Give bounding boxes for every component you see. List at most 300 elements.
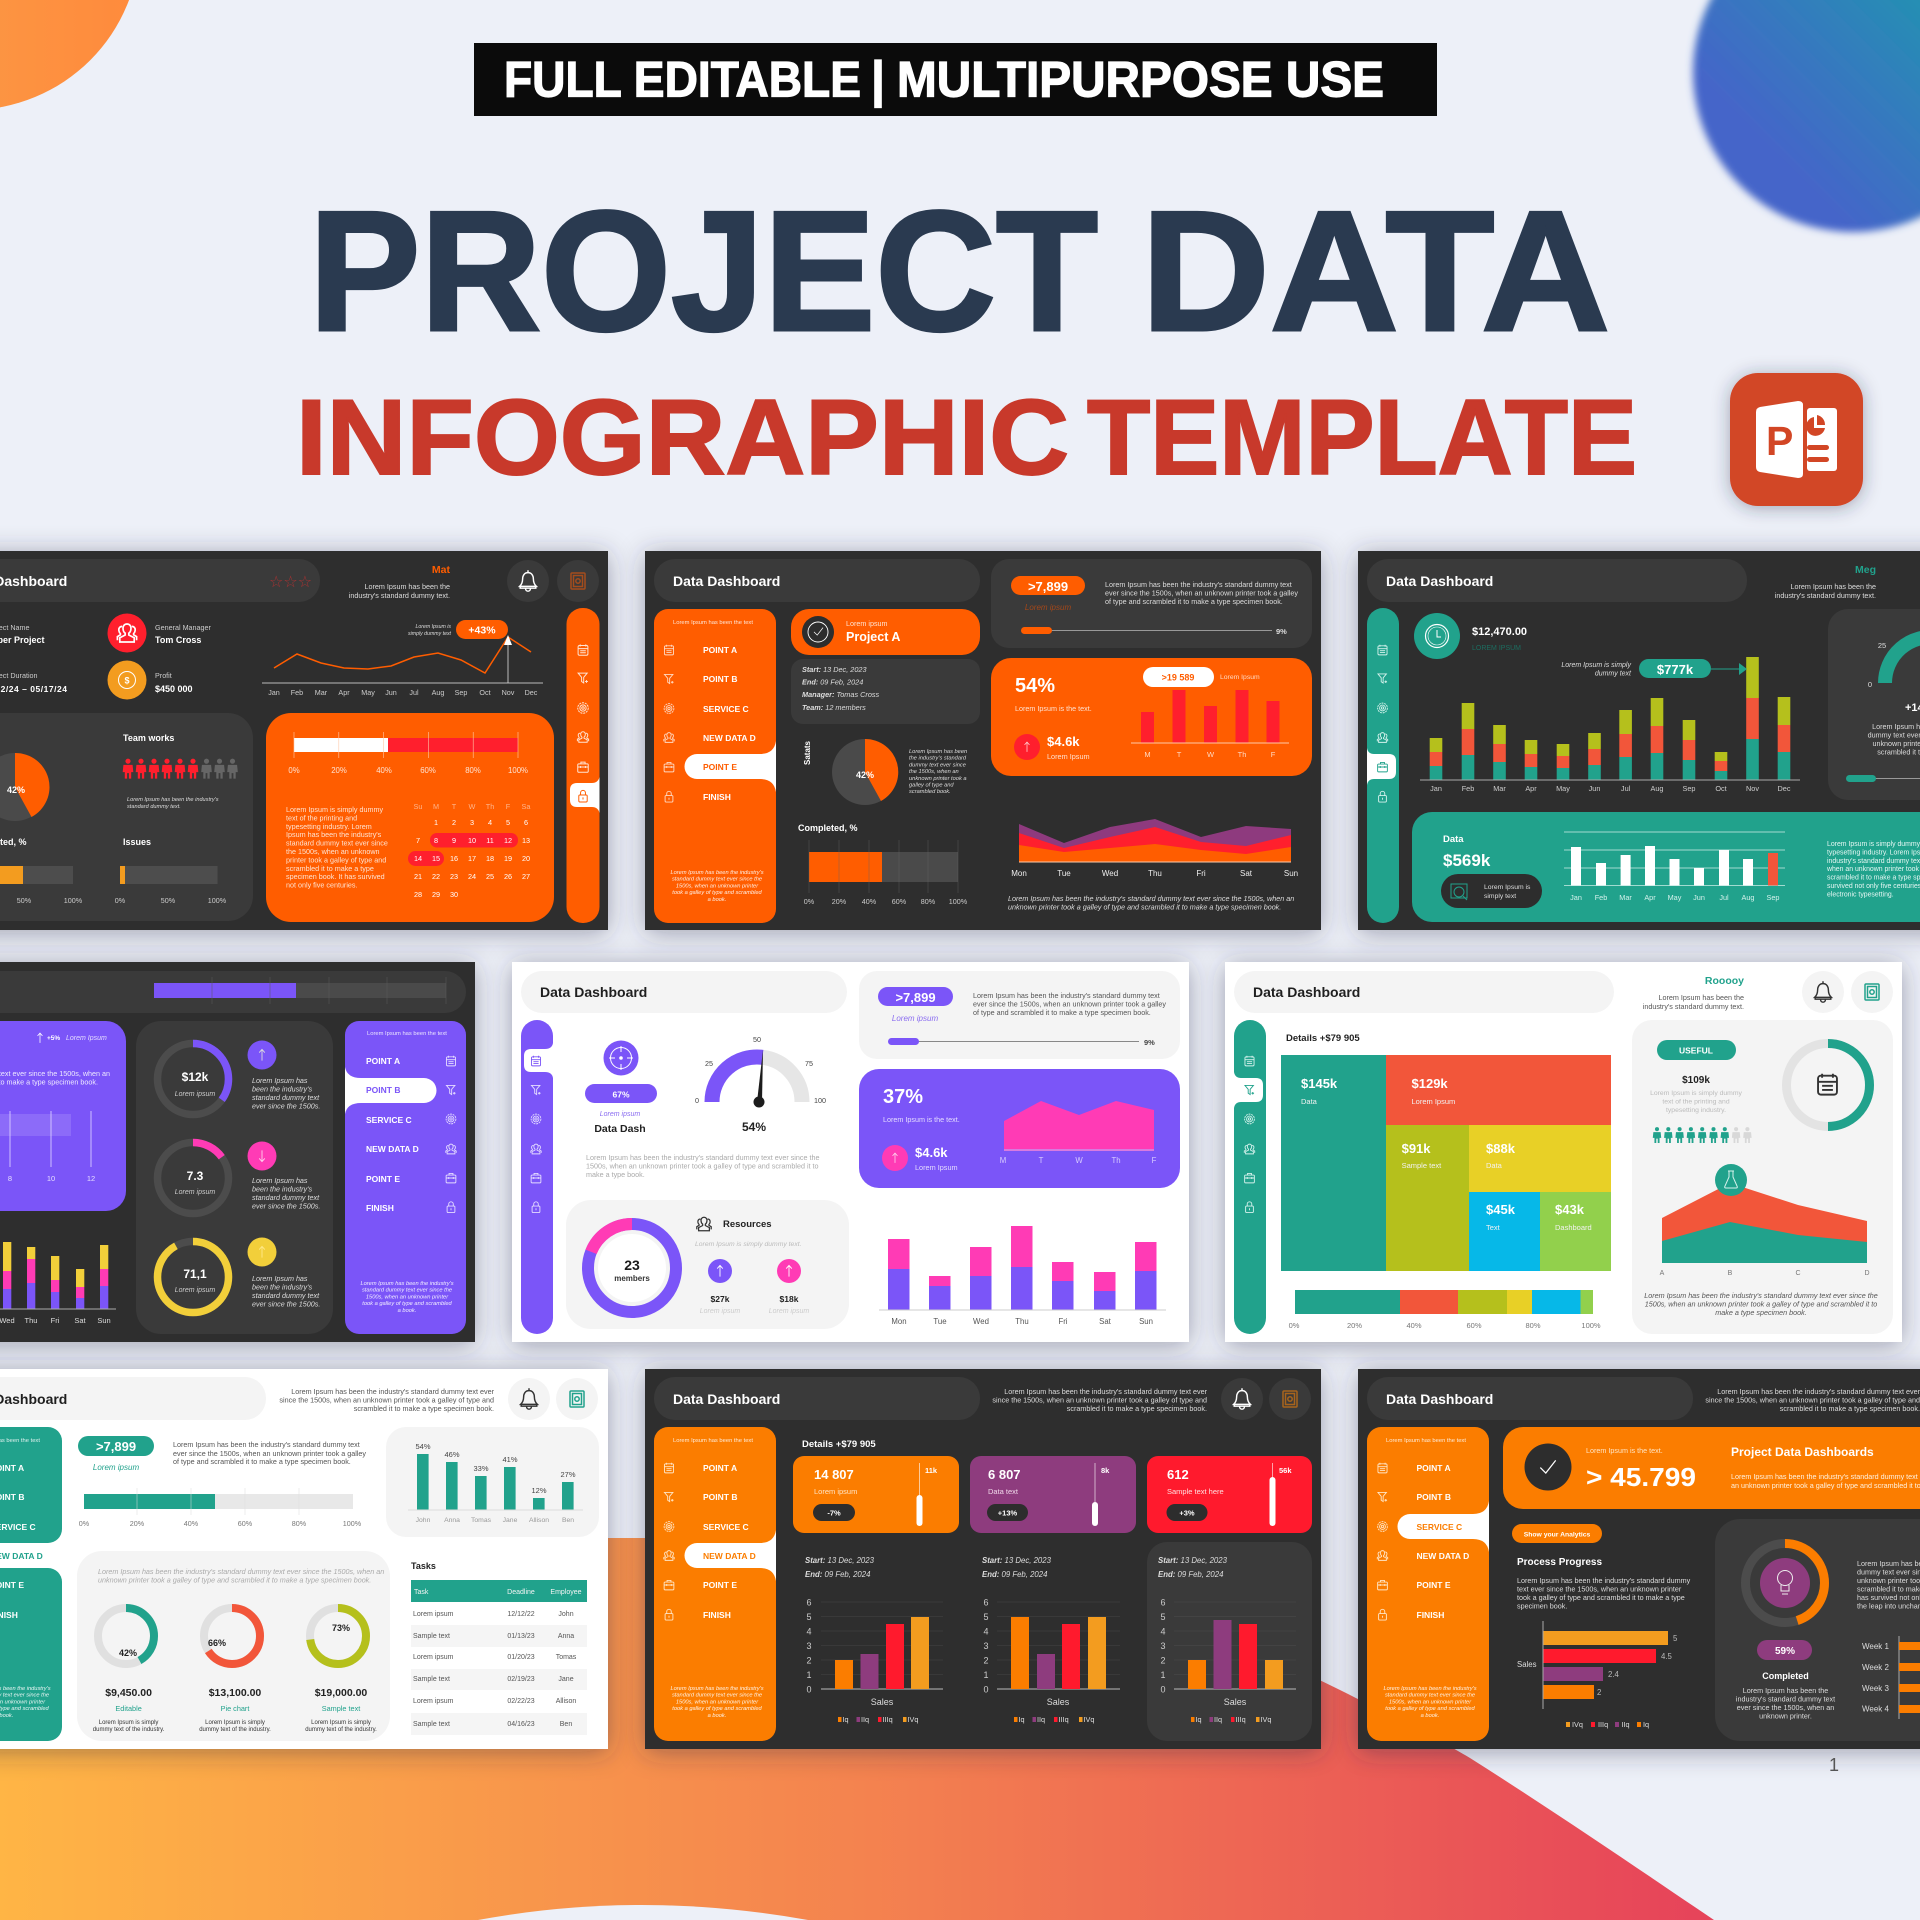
left navigation rail — [1234, 1020, 1266, 1334]
project details: End: 09 Feb, 2024 — [802, 678, 863, 686]
resources panel: Lorem ipsum — [769, 1308, 809, 1315]
sidebar menu: 1500s, when an unknown printer — [1389, 1699, 1472, 1705]
calendar: 26 — [504, 872, 512, 881]
area chart: Sun — [1284, 869, 1298, 878]
icon: coin: $ — [124, 676, 130, 686]
sidebar menu: a book. — [398, 1308, 416, 1314]
user text: industry's standard dummy text. — [349, 591, 450, 600]
KPI card: 6 807: +13% — [998, 1508, 1018, 1518]
completed bar: 50% — [17, 896, 32, 905]
donut with calendar icon — [1786, 1044, 1870, 1126]
calendar: 10 — [468, 836, 476, 845]
bar chart 2: 5 — [983, 1612, 989, 1622]
stacked bar chart: Sat — [1099, 1317, 1112, 1326]
panel: teal dark dashboard (row 1 right) — [1358, 551, 1920, 930]
icon: bell — [1802, 971, 1844, 1013]
orange banner — [1503, 1427, 1920, 1509]
bar chart 3: 4 — [1160, 1626, 1166, 1636]
gauge chart: 0 — [695, 1096, 699, 1105]
dates: End: 09 Feb, 2024 — [1158, 1570, 1224, 1579]
weekly bar chart: Week 3 — [1862, 1684, 1890, 1693]
left navigation rail — [1367, 608, 1399, 923]
stacked percent bar — [1289, 1290, 1601, 1330]
area chart — [1008, 819, 1298, 912]
sidebar menu: FINISH — [703, 792, 731, 802]
data dash stat: 67% — [612, 1090, 630, 1100]
user text: industry's standard dummy text. — [1643, 1002, 1744, 1011]
panel: progress rings — [136, 1021, 333, 1334]
tasks table: Allison — [556, 1698, 576, 1705]
sidebar menu: NEW DATA D — [703, 1551, 756, 1561]
dates: End: 09 Feb, 2024 — [982, 1570, 1048, 1579]
project card: Project A — [846, 630, 900, 644]
stacked bar chart: Thu — [1015, 1317, 1029, 1326]
horizontal bar chart: 2 — [1597, 1688, 1601, 1697]
bar chart 3: IIIq — [1236, 1715, 1246, 1724]
calendar: 7 — [416, 836, 420, 845]
panel: violet dark dashboard (row 2 left) — [0, 962, 475, 1342]
paragraph: specimen book. It has survived — [286, 872, 385, 881]
bar chart 1: IIIq — [882, 1715, 893, 1724]
pie chart 42%: unknown printer took a — [909, 776, 967, 782]
line chart: +43% — [468, 624, 496, 636]
bar chart by employee: John — [416, 1517, 431, 1524]
sidebar menu: standard dummy text ever since the — [1385, 1693, 1475, 1699]
paragraph: Lorem Ipsum is simply dummy — [286, 805, 383, 814]
weekly bar chart: Week 1 — [1862, 1642, 1890, 1651]
stat panel: ever since the 1500s, when an unknown printer took a galley — [1105, 588, 1298, 598]
paragraph: text of the printing and — [286, 813, 357, 822]
user text — [1643, 975, 1744, 1011]
calendar: 2 — [452, 818, 456, 827]
sidebar menu: a book. — [708, 897, 726, 903]
header bar — [1367, 1377, 1693, 1420]
calendar: 29 — [432, 890, 440, 899]
teal data panel: May — [1668, 893, 1682, 902]
sidebar menu: POINT B — [703, 674, 737, 684]
orange banner: Project Data Dashboards — [1731, 1445, 1874, 1459]
icon: team — [108, 614, 146, 652]
bar chart 1: Iq — [842, 1715, 849, 1724]
sidebar menu: a book. — [1421, 1713, 1439, 1719]
panel: orange dark dashboard (row 1 center) — [645, 551, 1321, 930]
weekly bar chart: Week 4 — [1862, 1704, 1890, 1714]
project facts: General Manager — [155, 623, 212, 632]
stacked bar chart: Sun — [97, 1316, 111, 1325]
stat panel: >7,899 — [1028, 579, 1068, 594]
user text: Mat — [432, 564, 450, 576]
sidebar menu: POINT B — [1416, 1492, 1451, 1502]
KPI card: 14 807: Lorem ipsum — [814, 1487, 857, 1496]
header bar: Data Dashboard — [540, 984, 647, 1000]
treemap: $88k — [1486, 1141, 1516, 1156]
stacked percent bar: 80% — [1525, 1321, 1541, 1330]
teal data panel: Jun — [1693, 893, 1705, 902]
sidebar menu: POINT E — [1416, 1580, 1451, 1590]
KPI card: 612: 612 — [1167, 1467, 1189, 1482]
header text: since the 1500s, when an unknown printer took a galley of type and — [279, 1396, 494, 1405]
panel: teal light dashboard (row 3 left) — [0, 1369, 608, 1749]
sidebar menu: Lorem Ipsum has been the industry's — [670, 1686, 764, 1692]
bottom white arc — [478, 1905, 808, 1920]
teal data panel: $569k — [1443, 851, 1491, 870]
stacked percent bar: 60% — [1466, 1321, 1482, 1330]
stat panel: of type and scrambled it to make a type specimen book. — [973, 1008, 1151, 1017]
sidebar menu: Lorem Ipsum has been the text — [673, 1438, 753, 1444]
completion panel: unknown printer. — [1759, 1712, 1812, 1720]
sidebar menu: POINT B — [703, 1492, 737, 1502]
calendar: M — [433, 802, 439, 811]
progress bar: 20% — [331, 766, 347, 775]
calendar: F — [506, 802, 511, 811]
treemap: Data — [1486, 1161, 1503, 1170]
header bar — [654, 1377, 980, 1420]
project facts — [0, 623, 212, 694]
progress bar: 60% — [420, 766, 436, 775]
calendar: 18 — [486, 854, 494, 863]
sidebar menu: standard dummy text ever since the — [672, 1693, 762, 1699]
analytics pill: Show your Analytics — [1524, 1532, 1591, 1538]
pie chart 42%: the industry's standard — [909, 756, 967, 762]
stat panel — [859, 971, 1180, 1059]
calendar: T — [452, 802, 457, 811]
calendar: 3 — [470, 818, 474, 827]
bar chart 1: IVq — [908, 1715, 918, 1724]
area chart: A — [1660, 1270, 1665, 1277]
teal data panel: electronic typesetting. — [1827, 891, 1894, 898]
bar chart by employee: Tomas — [471, 1517, 492, 1524]
data dash stat — [585, 1040, 657, 1135]
stat panel: Lorem ipsum — [892, 1014, 938, 1023]
dates: End: 09 Feb, 2024 — [805, 1570, 871, 1579]
horizontal bar chart: Sales — [1517, 1660, 1537, 1669]
clock stat: LOREM IPSUM — [1472, 645, 1521, 652]
panel: progress rings: 71,1 — [183, 1267, 207, 1281]
user text: Lorem Ipsum has been the — [1790, 582, 1876, 591]
horizontal bar chart: IVq — [1572, 1720, 1583, 1729]
sidebar menu: Lorem Ipsum has been the text — [1386, 1438, 1466, 1444]
stat and progress: 80% — [292, 1519, 307, 1528]
panel: progress rings: 7.3 — [187, 1169, 204, 1183]
completion panel: Lorem Ipsum has been the — [1743, 1686, 1828, 1695]
stacked bar chart: Dec — [1778, 784, 1791, 793]
stacked bar chart: Jan — [1430, 784, 1442, 793]
orange KPI panel with bar chart: M — [1144, 750, 1151, 759]
gauge chart: 54% — [742, 1120, 766, 1134]
bar chart 1 — [806, 1598, 943, 1724]
project details: Team: 12 members — [802, 703, 866, 712]
stat and progress: Lorem ipsum — [93, 1463, 139, 1472]
sidebar menu — [654, 609, 776, 923]
panel: progress rings: been the industry's — [252, 1282, 313, 1292]
area chart: Wed — [1102, 869, 1118, 878]
data dash stat: Data Dash — [594, 1123, 646, 1135]
sidebar menu: POINT A — [366, 1056, 400, 1066]
tasks table: Lorem ipsum — [413, 1698, 454, 1705]
main title: DATA — [1141, 176, 1610, 367]
resources panel: Resources — [723, 1219, 772, 1230]
bar chart 3 — [1160, 1598, 1296, 1724]
bar chart 2: IVq — [1084, 1715, 1094, 1724]
stacked bar chart: Jun — [1589, 784, 1600, 793]
stacked bar chart — [0, 1242, 116, 1325]
completion panel: 59% — [1775, 1646, 1795, 1657]
gauge chart: 75 — [805, 1059, 813, 1068]
stacked bar chart: dummy text — [1595, 670, 1632, 678]
clock stat — [1414, 613, 1527, 659]
KPI card: 6 807: 8k — [1101, 1466, 1110, 1475]
team pictogram: standard dummy text. — [127, 804, 181, 810]
sidebar menu: SERVICE C — [366, 1115, 412, 1125]
line chart: Feb — [291, 688, 303, 697]
donuts panel: Pie chart — [221, 1704, 249, 1713]
orange KPI panel with bar chart: F — [1271, 750, 1276, 759]
bar chart 2: Iq — [1018, 1715, 1025, 1724]
gauge chart: 25 — [705, 1059, 713, 1068]
sidebar menu: NEW DATA D — [366, 1144, 419, 1154]
project card — [791, 609, 980, 655]
tasks table: 04/16/23 — [507, 1721, 535, 1728]
page number: 1 — [1829, 1755, 1839, 1775]
horizontal bar chart: Iq — [1643, 1720, 1649, 1729]
bar chart by employee: 27% — [560, 1470, 576, 1479]
icon: PowerPoint logo: P — [1766, 418, 1793, 464]
teal data panel: Lorem Ipsum is — [1484, 884, 1531, 891]
KPI card: 612 — [1147, 1456, 1312, 1533]
donuts panel: $13,100.00 — [209, 1687, 261, 1699]
treemap: Lorem Ipsum — [1412, 1097, 1455, 1106]
violet KPI panel with area chart: F — [1152, 1156, 1157, 1165]
resources panel: 23 — [624, 1257, 640, 1273]
donuts panel: Lorem Ipsum has been the industry's standard dummy text ever since the 1500s, when an — [98, 1567, 384, 1576]
sidebar menu: took a galley of type and scrambled — [672, 1706, 763, 1712]
sidebar menu: standard dummy text ever since the — [362, 1288, 452, 1294]
gauge chart — [695, 1035, 826, 1134]
top banner: FULL EDITABLE — [504, 52, 861, 108]
calendar: 28 — [414, 890, 422, 899]
orange KPI panel with bar chart: Lorem Ipsum — [1220, 674, 1260, 681]
stacked bar chart: Mar — [1493, 784, 1506, 793]
user text: Lorem Ipsum has been the — [1658, 993, 1744, 1002]
line chart: Jan — [268, 688, 280, 697]
panel: orange progress and calendar — [266, 713, 554, 922]
panel: amber dark dashboard (row 3 right) — [1358, 1369, 1920, 1749]
panel: progress rings: Lorem ipsum — [175, 1189, 215, 1196]
teal data panel: Feb — [1595, 893, 1607, 902]
sidebar menu: took a galley of type and scrambled — [672, 890, 763, 896]
icon: safe — [1851, 971, 1893, 1013]
icon: safe — [556, 1378, 598, 1420]
stacked bar chart: Jul — [1621, 784, 1631, 793]
bar chart 1: IIq — [861, 1715, 869, 1724]
pie chart 42%: 42% — [7, 785, 25, 795]
stat panel: Lorem Ipsum has been the industry's standard dummy text — [1105, 580, 1292, 589]
bar chart 1: 3 — [806, 1641, 812, 1651]
orange KPI panel with bar chart: Lorem Ipsum is the text. — [1015, 704, 1092, 713]
gauge panel: 25 — [1878, 641, 1886, 650]
header text: Lorem Ipsum has been the industry's standard dummy text ever — [1004, 1387, 1208, 1396]
tasks table: Anna — [558, 1633, 574, 1640]
panel: progress rings: ever since the 1500s. — [252, 1202, 320, 1210]
violet chart panel: 10 — [47, 1174, 55, 1183]
area chart: Mon — [1011, 869, 1027, 878]
pie chart 42%: 42% — [856, 770, 874, 780]
right info panel: Lorem Ipsum is simply dummy — [1650, 1090, 1742, 1097]
bar chart by employee: 12% — [531, 1486, 547, 1495]
KPI card: 6 807: Data text — [988, 1487, 1019, 1496]
violet KPI panel with area chart: $4.6k — [915, 1145, 948, 1160]
resources panel: Lorem ipsum — [700, 1308, 740, 1315]
calendar: 13 — [522, 836, 530, 845]
line chart: Nov — [502, 688, 515, 697]
calendar: Sa — [522, 802, 531, 811]
violet chart panel: +5% — [47, 1035, 60, 1042]
bar chart 1: 0 — [806, 1684, 812, 1694]
stacked bar chart: Wed — [973, 1317, 989, 1326]
bar chart 1: 5 — [806, 1612, 812, 1622]
donut with bulb icon — [1746, 1544, 1824, 1622]
dates — [805, 1556, 1228, 1579]
completion panel: ever since the 1500s, when an — [1737, 1703, 1834, 1712]
progress bar: 80% — [465, 766, 481, 775]
calendar: 1 — [434, 818, 438, 827]
stacked bar chart: May — [1556, 784, 1570, 793]
panel: progress rings: standard dummy text — [252, 1193, 320, 1202]
project facts: Tom Cross — [155, 635, 201, 645]
resources panel: members — [614, 1274, 650, 1283]
calendar: 17 — [468, 854, 476, 863]
sidebar menu: POINT A — [1416, 1463, 1451, 1473]
bar chart 3: IVq — [1260, 1715, 1271, 1724]
process progress text: specimen book. — [1517, 1602, 1567, 1610]
right info panel: typesetting industry. — [1666, 1107, 1726, 1114]
completed bar chart: 0% — [804, 897, 815, 906]
bar chart 2: 2 — [983, 1656, 989, 1666]
stacked bar chart: $777k — [1657, 662, 1694, 677]
area chart: unknown printer took a galley of type and scrambled it to make a type specimen book. — [1008, 902, 1281, 912]
bar chart by employee: 41% — [502, 1455, 518, 1464]
pie chart 42%: the 1500s, when an — [909, 769, 959, 775]
panel: team and completion — [0, 713, 253, 921]
calendar: W — [469, 802, 476, 811]
sidebar menu: POINT B — [366, 1085, 400, 1095]
resources panel — [566, 1200, 849, 1329]
line chart: Aug — [432, 688, 444, 697]
bar chart 2: 0 — [983, 1684, 989, 1694]
pie chart 42% — [0, 753, 50, 821]
stacked bar chart: Oct — [1715, 784, 1727, 793]
area chart: Fri — [1196, 869, 1206, 878]
icon: bell — [1221, 1378, 1263, 1420]
header text: since the 1500s, when an unknown printer took a galley of type and — [1705, 1396, 1920, 1405]
stacked bar chart — [879, 1226, 1166, 1326]
line chart: May — [361, 688, 375, 697]
right navigation rail — [566, 608, 600, 923]
tasks table: Jane — [558, 1676, 574, 1683]
bar chart 2: 6 — [983, 1598, 989, 1608]
header text: Lorem Ipsum has been the industry's standard dummy text ever — [291, 1387, 495, 1396]
sidebar menu: standard dummy text ever since the — [672, 877, 762, 883]
donuts panel: $9,450.00 — [105, 1687, 152, 1699]
violet chart panel: 12 — [87, 1174, 95, 1183]
violet KPI panel with area chart: W — [1075, 1156, 1083, 1165]
team pictogram — [123, 733, 238, 810]
bar chart 1: 6 — [806, 1598, 812, 1608]
stat and progress: Lorem Ipsum has been the industry's standard dummy text — [173, 1440, 360, 1449]
project details: Start: 13 Dec, 2023 — [802, 665, 866, 674]
orange KPI panel with bar chart: Th — [1238, 750, 1246, 759]
details heading: Details +$79 905 — [802, 1439, 876, 1450]
gauge panel: 0 — [1868, 680, 1872, 689]
teal data panel: Mar — [1619, 893, 1632, 902]
area chart — [1660, 1164, 1870, 1277]
tasks table: 12/12/22 — [507, 1611, 535, 1618]
KPI card: 6 807: 6 807 — [988, 1467, 1021, 1482]
line chart: Apr — [338, 688, 350, 697]
completion panel — [1715, 1519, 1920, 1741]
pie chart 42%: galley of type and — [909, 782, 954, 788]
violet KPI panel with area chart: T — [1039, 1156, 1044, 1165]
sidebar menu — [345, 1021, 466, 1334]
orange banner: Lorem Ipsum is the text. — [1586, 1446, 1663, 1455]
process progress text — [1517, 1557, 1691, 1610]
project details: Manager: Tomas Cross — [802, 690, 880, 699]
caption: Lorem Ipsum has been the industry's standard dummy text ever since the — [1644, 1291, 1878, 1300]
team pictogram: Team works — [123, 733, 174, 743]
analytics pill — [1512, 1524, 1602, 1543]
top banner: | — [871, 52, 885, 108]
stat and progress: 20% — [130, 1519, 145, 1528]
header bar: Data Dashboard — [673, 1391, 780, 1407]
teal data panel: Jan — [1570, 893, 1582, 902]
sidebar menu: Lorem Ipsum has been the industry's — [360, 1281, 454, 1287]
orange KPI panel with bar chart: T — [1177, 750, 1182, 759]
donuts panel: Lorem Ipsum is simply — [205, 1720, 265, 1726]
paragraph: Lorem Ipsum has been the industry's standard dummy text ever since the — [586, 1153, 820, 1162]
calendar: Su — [414, 802, 422, 811]
calendar: 22 — [432, 872, 440, 881]
process progress text: text ever since the 1500s, when an unknown printer — [1517, 1584, 1682, 1594]
bar chart by employee: 46% — [444, 1450, 460, 1459]
stat panel: Lorem ipsum — [1025, 603, 1071, 612]
stacked bar chart: Fri — [51, 1316, 60, 1325]
progress bar: 100% — [508, 766, 528, 775]
tasks table: 02/22/23 — [507, 1698, 535, 1705]
bar chart 1: Sales — [871, 1697, 894, 1707]
bar chart 2: 1 — [983, 1670, 989, 1680]
paragraph: make a type book. — [586, 1170, 645, 1179]
panel: violet light dashboard (row 2 center) — [512, 962, 1189, 1342]
stacked bar chart: Lorem Ipsum is simply — [1561, 662, 1631, 669]
completed bar — [0, 837, 83, 905]
sidebar menu: Lorem Ipsum has been the industry's — [1383, 1686, 1477, 1692]
paragraph: not only five centuries. — [286, 881, 358, 890]
bar chart by employee: Allison — [529, 1517, 549, 1524]
calendar: 9 — [452, 836, 456, 845]
process progress text: took a galley of type and scrambled it to make a type — [1517, 1593, 1685, 1602]
caption: 1500s, when an unknown printer took a galley of type and scrambled it to — [1645, 1300, 1877, 1309]
calendar: 19 — [504, 854, 512, 863]
tasks table: Lorem ipsum — [413, 1611, 454, 1618]
header text: scrambled it to make a type specimen book. — [1067, 1404, 1207, 1413]
panel: progress rings: Lorem Ipsum has — [252, 1274, 308, 1283]
orange KPI panel with bar chart: $4.6k — [1047, 734, 1080, 749]
paragraph: the 1500s, when an unknown — [286, 847, 380, 856]
clock stat: $12,470.00 — [1472, 626, 1527, 638]
stat panel: >7,899 — [895, 990, 936, 1005]
violet chart panel: Lorem Ipsum — [66, 1035, 107, 1042]
header bar: ☆☆☆ — [269, 572, 312, 591]
